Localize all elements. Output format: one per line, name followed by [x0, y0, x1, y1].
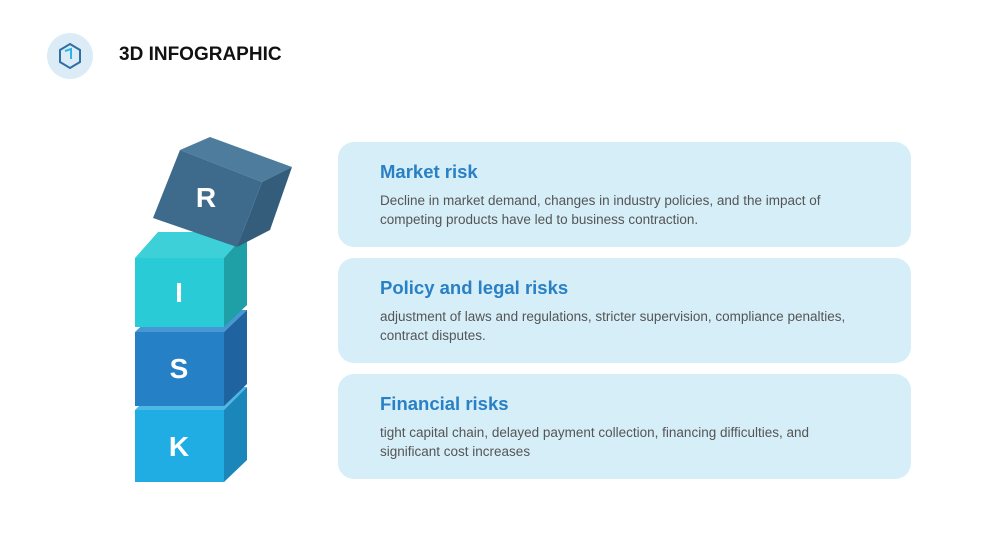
title: 3D INFOGRAPHIC — [119, 44, 282, 65]
card: financial risks: tight capital chain, delayed payment collection, financing difficulties, and significant cost increases — [380, 425, 809, 459]
cube S: S — [170, 353, 188, 384]
card: policy and legal risks: adjustment of laws and regulations, stricter supervision, compliance penalties, contract disputes. — [380, 309, 845, 343]
card: market risk — [338, 142, 911, 247]
card: policy and legal risks: Policy and legal risks — [380, 277, 568, 298]
cube I: I — [175, 277, 183, 308]
cube I — [135, 232, 247, 327]
card: policy and legal risks — [338, 258, 911, 363]
card: market risk: Decline in market demand, changes in industry policies, and the impact of competing products have led to business contraction. — [380, 193, 820, 227]
cube stack: RISK — [135, 137, 292, 482]
cube K — [135, 387, 247, 482]
cube K: K — [169, 431, 189, 462]
card: market risk: Market risk — [380, 161, 478, 182]
card: financial risks: Financial risks — [380, 393, 509, 414]
cube S — [135, 310, 247, 406]
cube R — [153, 137, 292, 247]
logo icon — [47, 33, 93, 79]
card: financial risks — [338, 374, 911, 479]
cube R: R — [196, 182, 216, 213]
